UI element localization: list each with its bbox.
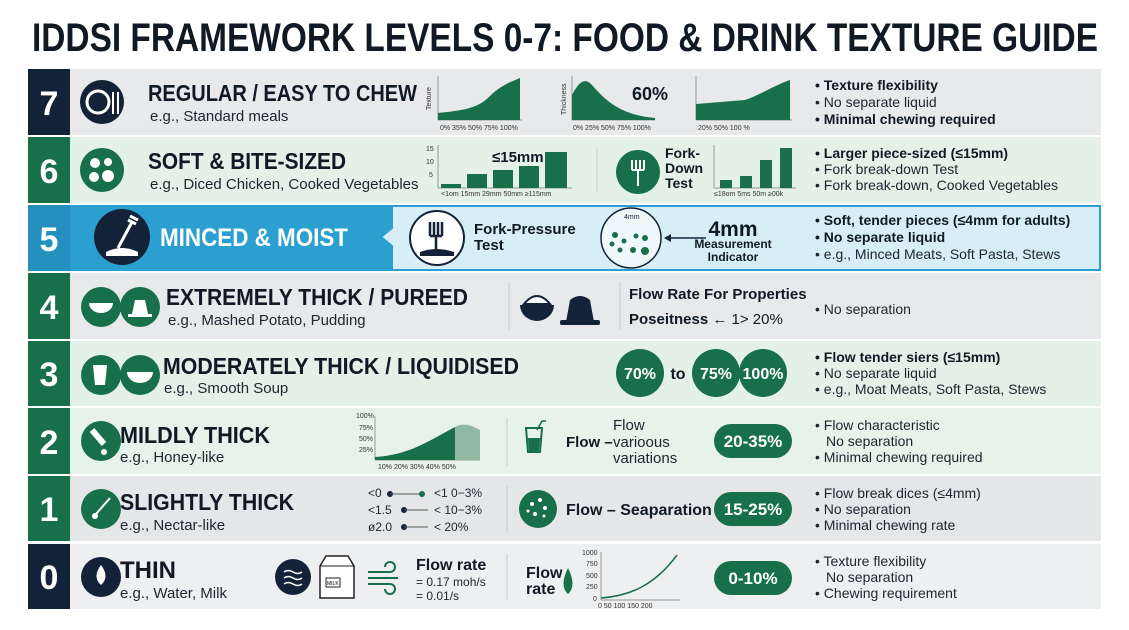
bullets: level 0 [815, 553, 957, 601]
dot scale list [368, 486, 482, 534]
bullets: level 6: • Fork break-down Test [815, 161, 958, 177]
row: level 4: Flow Rate For Properties [629, 286, 807, 303]
chart: flow rate curve: 0 [593, 596, 597, 603]
chart: thickness curve [561, 76, 668, 132]
icon: glass with straw [526, 421, 546, 452]
row: level 4: e.g., Mashed Potato, Pudding [168, 312, 366, 329]
chart: flow curve [356, 413, 480, 471]
icon: fork-down test [616, 145, 703, 194]
row: level 2: variations [613, 450, 677, 467]
row: level 0: e.g., Water, Milk [120, 585, 227, 602]
bullets: level 2 [815, 417, 983, 465]
chart: bite size bars: 5 [429, 172, 433, 179]
bullets: level 5: • No separate liquid [815, 229, 945, 245]
icon: fork pressure [410, 211, 464, 265]
chart: flow curve: 75% [359, 425, 373, 432]
icon: fork-down test: Test [665, 175, 693, 191]
row: level 3: MODERATELY THICK / LIQUIDISED [163, 353, 519, 379]
panel: fork-pressure and measurement: Fork-Pressure [474, 221, 576, 238]
row: level 0: rate [526, 581, 555, 598]
chart: flow rate curve: 500 [586, 573, 598, 580]
row: level 4 [28, 273, 1101, 339]
icon: glass and soup bowl [81, 355, 160, 395]
bullets: level 7 [815, 77, 996, 127]
chart: flow curve: 10% 20% 30% 40% 50% [378, 464, 456, 471]
chart: fork bars [714, 145, 796, 198]
bullets: level 3: • No separate liquid [815, 365, 937, 381]
chart: flow rate curve: 750 [586, 561, 598, 568]
row: level 5 (highlighted): 5 [40, 221, 58, 259]
icon: milk carton [320, 556, 354, 598]
bullets: level 6: • Larger piece-sized (≤15mm) [815, 145, 1008, 161]
icon: plate and cutlery [80, 80, 124, 124]
row: level 0: = 0.01/s [416, 589, 459, 603]
icon: diced pieces [80, 148, 124, 192]
row: level 2: 2 [40, 424, 58, 462]
chart: flow curve: 50% [359, 436, 373, 443]
chart: flow curve: 25% [359, 447, 373, 454]
bullets: level 3: • Flow tender siers (≤15mm) [815, 349, 1000, 365]
row: level 2: Flow – [566, 434, 613, 451]
row: level 0: Flow [526, 565, 563, 582]
icon: puree bowl and pudding [81, 287, 160, 327]
row: level 4: EXTREMELY THICK / PUREED [166, 284, 468, 310]
chart: texture curve [426, 76, 522, 132]
bullets: level 3: • e.g., Moat Meats, Soft Pasta, Stews [815, 381, 1046, 397]
row: level 1: 1 [40, 491, 58, 529]
panel: fork-pressure and measurement: 4mm [708, 218, 758, 241]
row: level 2: Flow [613, 417, 645, 434]
bullets: level 2: • Flow characteristic [815, 417, 940, 433]
percent circles: to [670, 366, 686, 383]
pill: 0-10% [714, 561, 792, 595]
icon: water drop [81, 557, 121, 597]
row: level 2: varioous [613, 434, 670, 451]
panel: fork-pressure and measurement: Indicator [708, 250, 759, 264]
row: level 7: e.g., Standard meals [150, 108, 288, 125]
percent circles: 100% [743, 366, 783, 383]
chart: flow rate curve: 250 [586, 584, 598, 591]
row: level 1 [28, 476, 1101, 541]
bullets: level 2: No separation [826, 433, 913, 449]
icon: bowl and pudding dark [520, 296, 600, 325]
chart: third curve [696, 76, 792, 132]
percent circles: 75% [700, 366, 732, 383]
bullets: level 6 [815, 145, 1058, 193]
dot scale list: <1 0−3% [434, 486, 482, 500]
dot scale list: <1.5 [368, 503, 392, 517]
panel: fork-pressure and measurement: Measurement [694, 237, 772, 251]
icon: fork-down test: Down [665, 160, 703, 176]
pill: 20-35% [714, 424, 792, 458]
chart: thickness curve: 60% [632, 84, 668, 104]
row: level 3: 3 [40, 356, 58, 394]
chart: bite size bars: 15 [426, 146, 434, 153]
row: level 7 [28, 69, 1101, 135]
chart: bite size bars: 10 [426, 159, 434, 166]
row: level 6: e.g., Diced Chicken, Cooked Vegetables [150, 176, 418, 193]
percent circles: 70% [624, 366, 656, 383]
dot scale list: <0 [368, 486, 382, 500]
bullets: level 1: • Minimal chewing rate [815, 517, 956, 533]
bullets: level 7: • Minimal chewing required [815, 111, 996, 127]
pill: 15-25%: 15-25% [724, 500, 782, 519]
row: level 7: REGULAR / EASY TO CHEW [148, 80, 417, 106]
bullets: level 1: • No separation [815, 501, 911, 517]
bullets: level 7: • Texture flexibility [815, 77, 938, 93]
row: level 0: = 0.17 moh/s [416, 575, 486, 589]
dot scale list: ø2.0 [368, 520, 392, 534]
bullets: level 4: • No separation [815, 301, 911, 317]
row: level 3 [28, 341, 1101, 406]
row: level 0 [28, 544, 1101, 610]
chart: flow rate curve: 0 50 100 150 200 [598, 603, 653, 610]
icon: separation dots [519, 490, 557, 528]
bullets: level 0: No separation [826, 569, 913, 585]
panel: fork-pressure and measurement [381, 206, 1100, 270]
dot scale list: < 20% [434, 520, 469, 534]
chart: flow curve: 100% [356, 413, 374, 420]
icon: water waves [275, 559, 311, 595]
bullets: level 5: • e.g., Minced Meats, Soft Pasta, Stews [815, 246, 1060, 262]
row: level 4: Poseitness ← 1> 20% [629, 311, 783, 328]
icon: milk carton: MILK [327, 581, 339, 587]
row: level 6: 6 [40, 153, 58, 191]
row: level 2: MILDLY THICK [120, 422, 270, 448]
row: level 6 [28, 137, 1101, 203]
bullets: level 6: • Fork break-down, Cooked Vegetables [815, 177, 1058, 193]
chart: bite size bars [426, 145, 572, 198]
icon: honey dipper [81, 421, 121, 461]
row: level 2: e.g., Honey-like [120, 449, 224, 466]
bullets: level 0: • Texture flexibility [815, 553, 926, 569]
bullets: level 7: • No separate liquid [815, 94, 937, 110]
chart: thickness curve: Thickness [561, 83, 568, 115]
bullets: level 0: • Chewing requirement [815, 585, 957, 601]
row: level 7: 7 [40, 85, 58, 123]
row: level 1: Flow – Seaparation [566, 502, 712, 519]
row: level 0: Flow rate [416, 557, 486, 574]
chart: texture curve: Texture [426, 87, 433, 110]
row: level 3: e.g., Smooth Soup [164, 380, 288, 397]
row: level 0: THIN [120, 557, 176, 584]
chart: flow rate curve: 1000 [582, 550, 598, 557]
row: level 5 (highlighted): MINCED & MOIST [160, 224, 348, 252]
icon: 4mm measurement circle: 4mm [624, 214, 640, 221]
chart: bite size bars: <1om 15mm 29mm 50mm ≥115mm [441, 191, 552, 198]
chart: fork bars: ≤18om 5ms 50m ≥00k [714, 191, 784, 198]
row: level 6: SOFT & BITE-SIZED [148, 148, 346, 174]
row: level 0: 0 [40, 559, 58, 597]
row: level 4: 4 [40, 289, 59, 327]
chart: texture curve: 0% 35% 50% 75% 100% [440, 125, 518, 132]
chart: thickness curve: 0% 25% 50% 75% 100% [573, 125, 651, 132]
chart: bite size bars: ≤15mm [492, 149, 544, 166]
bullets: level 1 [815, 485, 981, 533]
percent circles [616, 349, 787, 397]
panel: fork-pressure and measurement: Test [474, 237, 504, 254]
pill: 0-10%: 0-10% [728, 569, 778, 588]
pill: 20-35%: 20-35% [724, 432, 782, 451]
row: level 1: e.g., Nectar-like [120, 517, 225, 534]
dot scale list: < 10−3% [434, 503, 482, 517]
row: level 1: SLIGHTLY THICK [120, 489, 294, 515]
icon: fork mincing [94, 209, 150, 265]
chart: flow rate curve [582, 550, 680, 610]
icon: wind flow [368, 562, 398, 594]
icon: spoon [81, 489, 121, 529]
icon: green drop [564, 568, 572, 594]
bullets: level 3 [815, 349, 1046, 397]
bullets: level 5: • Soft, tender pieces (≤4mm for adults) [815, 212, 1070, 228]
bullets: level 1: • Flow break dices (≤4mm) [815, 485, 981, 501]
row: level 5 (highlighted) [28, 205, 1100, 271]
arrow: to measurement [664, 234, 706, 242]
pill: 15-25% [714, 492, 792, 526]
bullets: level 2: • Minimal chewing required [815, 449, 983, 465]
chart: third curve: 20% 50% 100 % [698, 125, 750, 132]
icon: 4mm measurement circle [601, 208, 661, 268]
bullets: level 5 [815, 212, 1070, 262]
icon: fork-down test: Fork- [665, 145, 700, 161]
row: level 2 [28, 408, 1101, 474]
